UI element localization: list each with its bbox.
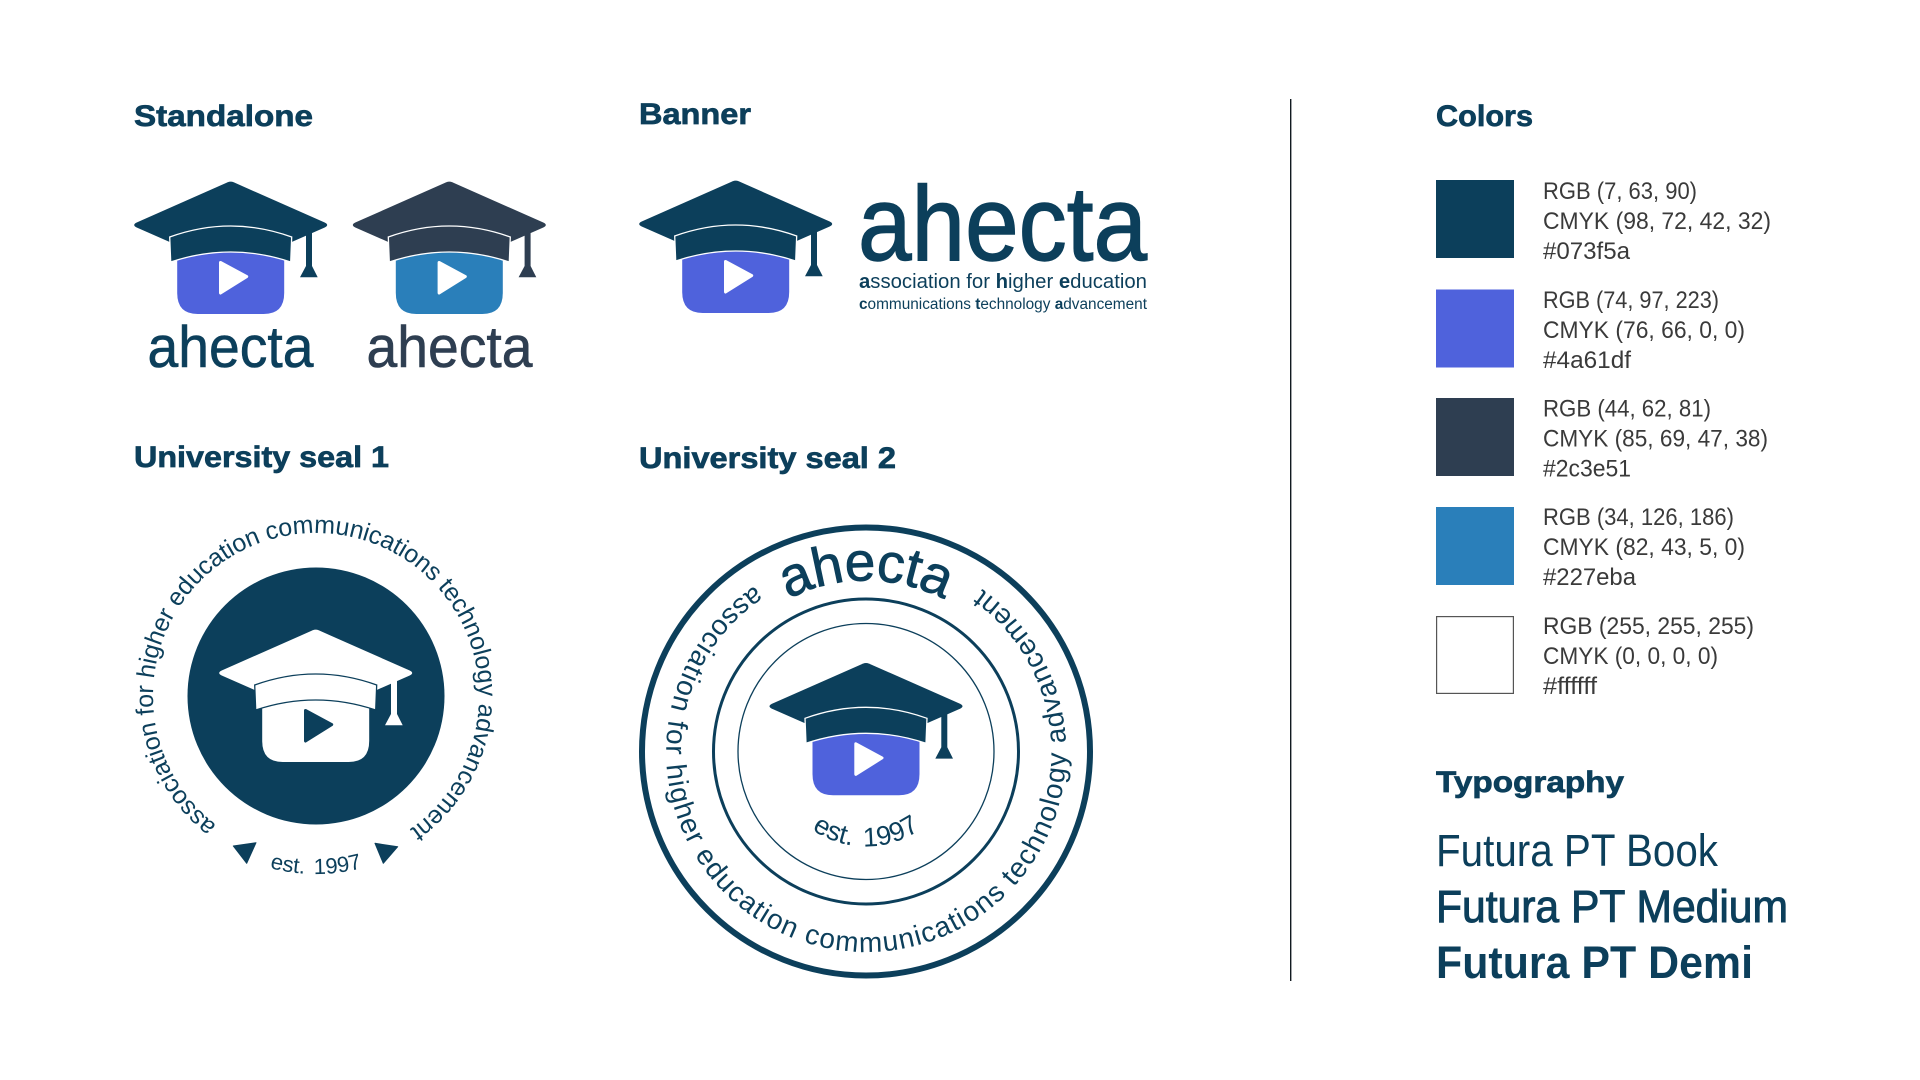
- hex value: #227eba: [1543, 564, 1637, 591]
- hex value: #073f5a: [1543, 238, 1631, 265]
- sample: Medium: Futura PT Medium: [1436, 881, 1788, 932]
- swatch: [1436, 398, 1514, 476]
- hex value: #2c3e51: [1543, 456, 1631, 482]
- ring text: association for higher education communications technology advancement: [135, 520, 494, 841]
- color swatch row 4: [1436, 504, 1745, 591]
- ring text: association for higher education communications technology advancement: [665, 588, 1072, 952]
- CMYK value: CMYK (76, 66, 0, 0): [1543, 317, 1745, 344]
- heading: Colors: Colors: [1436, 100, 1533, 133]
- established year: est. 1997: [814, 814, 914, 847]
- vertical divider: [1290, 99, 1291, 981]
- wordmark: ahecta: [148, 315, 314, 380]
- heading: Banner: Banner: [639, 98, 751, 131]
- RGB value: RGB (7, 63, 90): [1543, 178, 1697, 205]
- right arrow marker: [375, 843, 398, 863]
- curved wordmark: ahecta: [782, 546, 950, 600]
- RGB value: RGB (44, 62, 81): [1543, 396, 1711, 422]
- RGB value: RGB (74, 97, 223): [1543, 287, 1719, 314]
- wordmark: ahecta: [858, 165, 1147, 283]
- left arrow marker: [233, 843, 256, 863]
- established year: est. 1997: [272, 854, 358, 874]
- seal 2: [639, 524, 1093, 978]
- hex value: #4a61df: [1543, 347, 1631, 374]
- icon: graduation cap with play button: [770, 663, 962, 795]
- CMYK value: CMYK (85, 69, 47, 38): [1543, 426, 1768, 452]
- seal 1: [135, 520, 494, 874]
- CMYK value: CMYK (82, 43, 5, 0): [1543, 534, 1745, 561]
- wordmark: ahecta: [366, 315, 533, 380]
- color swatch row 5: [1437, 613, 1754, 700]
- CMYK value: CMYK (0, 0, 0, 0): [1543, 643, 1718, 670]
- sample: Demi: Futura PT Demi: [1436, 937, 1753, 988]
- color swatch row 2: [1436, 287, 1745, 374]
- heading: Standalone: Standalone: [134, 100, 313, 133]
- swatch: [1436, 180, 1514, 258]
- color swatch row 1: [1436, 178, 1771, 265]
- heading: University seal 2: University seal 2: [639, 442, 896, 475]
- RGB value: RGB (255, 255, 255): [1543, 613, 1754, 640]
- icon: graduation cap with play button: [134, 182, 327, 314]
- logo: standalone navy and indigo: [134, 182, 327, 380]
- icon: graduation cap with play button: [639, 181, 832, 313]
- logo: banner: [639, 165, 1148, 313]
- seal disc: [188, 568, 444, 824]
- color swatch row 3: [1436, 396, 1768, 482]
- heading: Typography: Typography: [1436, 766, 1624, 799]
- outer ring: [642, 528, 1090, 976]
- swatch: [1437, 617, 1513, 693]
- RGB value: RGB (34, 126, 186): [1543, 504, 1734, 531]
- sample: Book: Futura PT Book: [1436, 825, 1718, 876]
- swatch: [1436, 507, 1514, 585]
- tagline line 1: association for higher education: [859, 271, 1147, 293]
- CMYK value: CMYK (98, 72, 42, 32): [1543, 208, 1771, 235]
- swatch: [1436, 290, 1514, 368]
- inner ring: [738, 624, 994, 880]
- icon: white graduation cap with play button: [219, 630, 412, 762]
- middle ring: [714, 599, 1018, 904]
- typography samples: [1436, 825, 1788, 988]
- hex value: #ffffff: [1543, 673, 1597, 700]
- icon: graduation cap with play button: [353, 182, 546, 314]
- tagline line 2: communications technology advancement: [859, 296, 1148, 313]
- heading: University seal 1: University seal 1: [134, 441, 389, 474]
- logo: standalone slate and blue: [353, 182, 546, 380]
